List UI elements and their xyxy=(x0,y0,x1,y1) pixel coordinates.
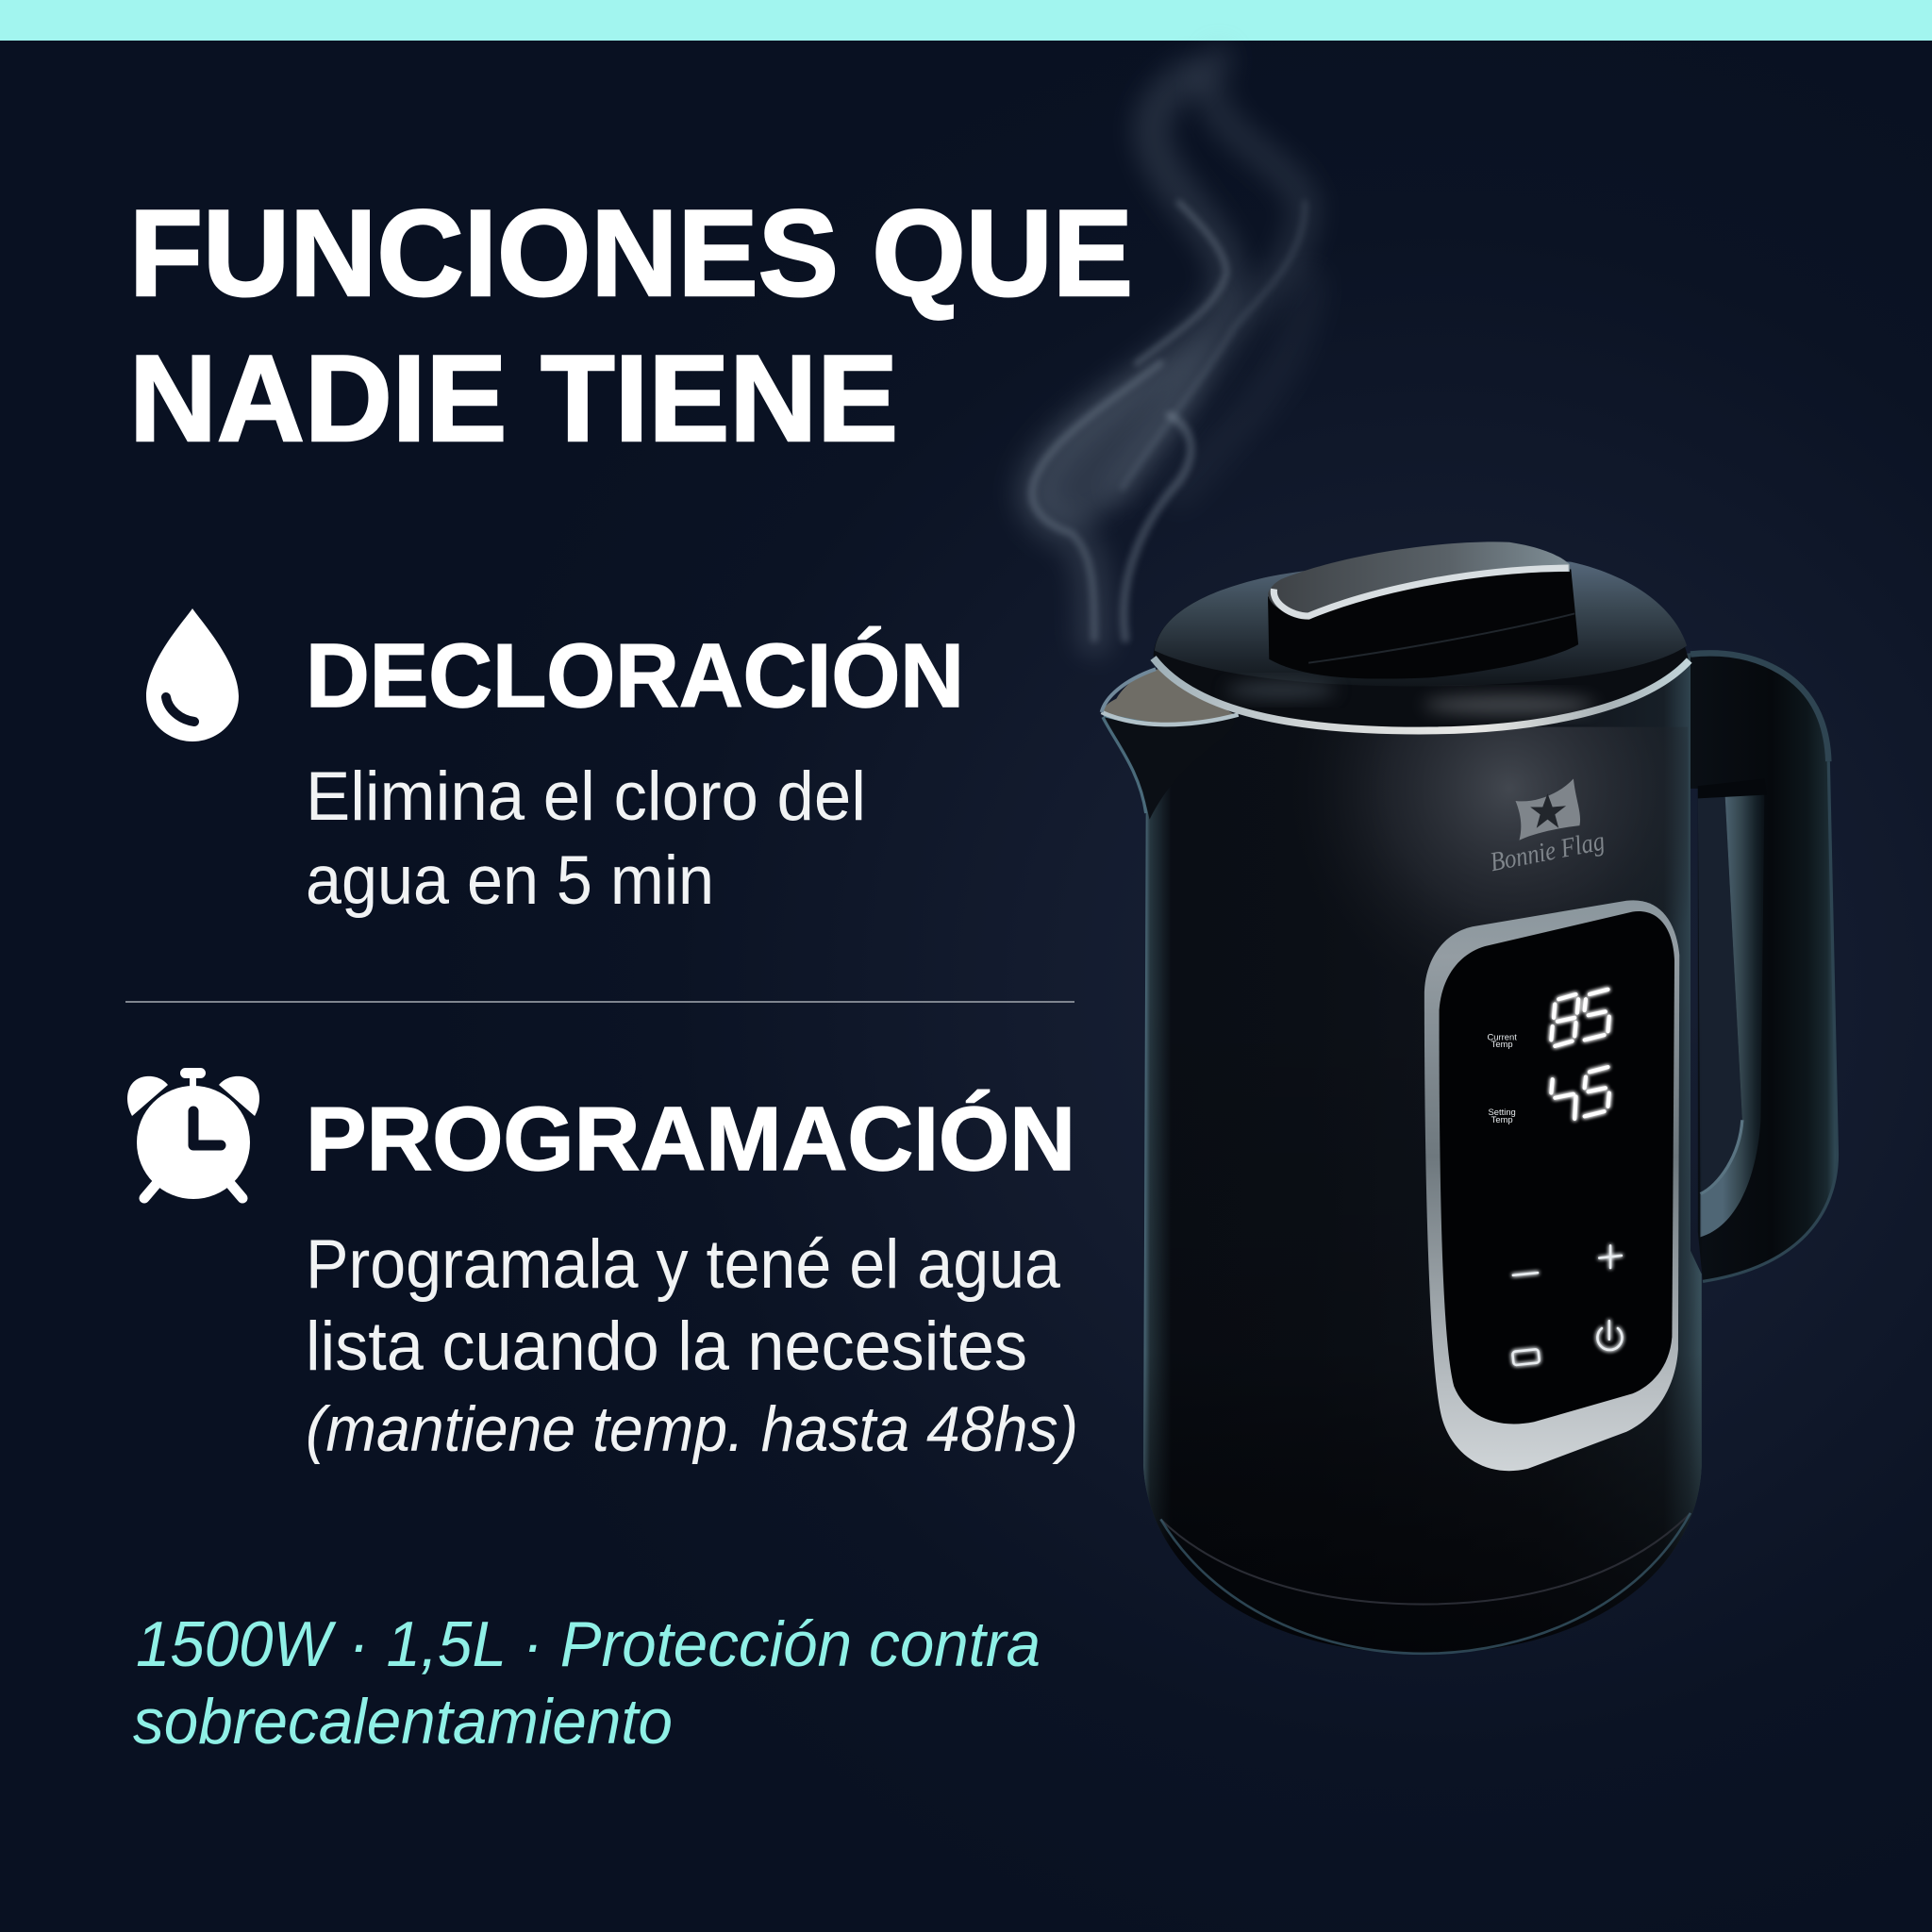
specs footer: sobrecalentamiento xyxy=(133,1686,673,1757)
touch controls xyxy=(1512,1245,1623,1365)
specs footer xyxy=(133,1608,1041,1757)
text: decloración description: Elimina el cloro del xyxy=(306,758,866,835)
display labels: Temp xyxy=(1491,1114,1513,1124)
display readings xyxy=(1551,990,1609,1119)
text: programación description xyxy=(306,1226,1078,1465)
text: decloración description: agua en 5 min xyxy=(306,842,714,919)
heading: programación: PROGRAMACIÓN xyxy=(306,1089,1075,1190)
title: FUNCIONES QUE xyxy=(129,184,1133,322)
icon: alarm clock xyxy=(127,1068,259,1199)
panel screen xyxy=(1440,911,1674,1424)
steam xyxy=(1032,58,1309,639)
kettle xyxy=(1102,541,1837,1654)
top accent bar xyxy=(0,0,1932,41)
kettle knob xyxy=(1268,541,1578,679)
kettle lid xyxy=(1154,560,1690,732)
display labels xyxy=(1487,1031,1517,1124)
title: NADIE TIENE xyxy=(129,329,898,467)
icon: water drop xyxy=(146,608,239,741)
text: programación description: Programala y tené el agua xyxy=(306,1226,1060,1303)
control panel xyxy=(1424,900,1679,1471)
text: decloración description xyxy=(306,758,866,919)
logo: bonnie flag: Bonnie Flag xyxy=(1488,825,1607,877)
text: programación description: lista cuando la necesites xyxy=(306,1308,1027,1385)
kettle spout xyxy=(1102,669,1239,724)
title xyxy=(129,184,1133,467)
display labels: Current xyxy=(1487,1031,1517,1041)
display labels: Setting xyxy=(1489,1107,1516,1117)
text: programación description: (mantiene temp. hasta 48hs) xyxy=(306,1393,1078,1465)
display labels: Temp xyxy=(1491,1039,1513,1049)
panel bezel xyxy=(1424,900,1679,1471)
kettle handle xyxy=(1690,653,1837,1281)
kettle body xyxy=(1102,653,1702,1654)
logo: bonnie flag xyxy=(1488,778,1607,877)
specs footer: 1500W · 1,5L · Protección contra xyxy=(136,1608,1041,1680)
heading: decloración: DECLORACIÓN xyxy=(306,625,964,726)
